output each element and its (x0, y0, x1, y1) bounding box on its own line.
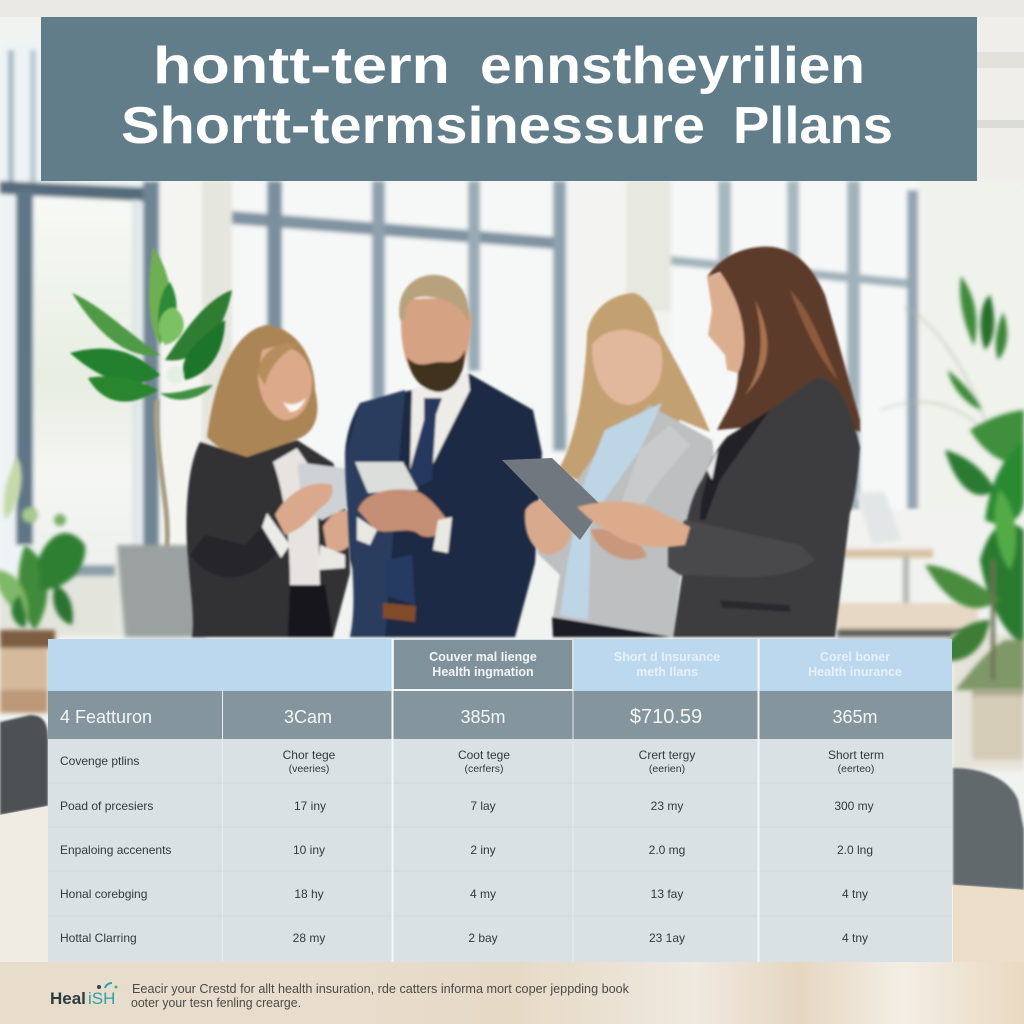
person: woman in dark blazer (577, 247, 860, 637)
table body background (48, 639, 952, 962)
plant: right (880, 276, 1024, 690)
row: accents (60, 843, 873, 857)
summary row: 385m (460, 707, 506, 727)
row: coverage: 4 tny (842, 887, 868, 901)
logo: Healish: Heal (50, 989, 86, 1008)
foreground chairs (0, 715, 1024, 890)
centre window (232, 181, 566, 461)
title text: Pllans (733, 97, 893, 155)
summary row: $710.59 (630, 706, 702, 728)
row: coverage: 4 my (470, 887, 496, 901)
footer note: Eeacir your Crestd for allt health insuration, rde catters informa mort coper jeppding book (132, 982, 630, 996)
row: coverage: 13 fay (651, 887, 683, 901)
row: coverage (60, 887, 868, 901)
row: clarring: 4 tny (842, 931, 868, 945)
row: period: Poad of prcesiers (60, 799, 153, 813)
title text (121, 37, 893, 155)
row: period: 7 lay (470, 799, 496, 813)
row: accents: 2 iny (470, 843, 496, 857)
row: period (60, 799, 874, 813)
right window (671, 181, 918, 513)
summary row: 365m (832, 707, 878, 727)
person: man in navy suit (345, 275, 542, 637)
person: woman in grey blazer (525, 293, 713, 637)
row: coverage plans: (veeries) (289, 763, 329, 775)
row: coverage plans: (eerteo) (838, 763, 874, 775)
floor and distant furniture (0, 491, 1024, 770)
row: coverage plans: Short term (828, 748, 884, 762)
row: period: 300 my (834, 799, 874, 813)
title text: Shortt-termsinessure (121, 97, 705, 155)
footer note (131, 982, 630, 1010)
person: woman on left (186, 325, 357, 637)
header row: meth Ilans (636, 665, 698, 679)
title text: ennstheyrilien (480, 37, 865, 95)
summary row (48, 691, 952, 739)
wall columns (160, 181, 202, 561)
foreground desk (0, 806, 1024, 1024)
header row: Health ingmation (432, 665, 534, 679)
tablet: held by grey blazer woman (502, 458, 603, 540)
row: period: 23 my (651, 799, 683, 813)
logo: Healish: iSH (88, 989, 115, 1008)
logo: Healish (50, 983, 118, 1008)
row: coverage: 18 hy (294, 887, 324, 901)
row: coverage plans: Coot tege (458, 748, 510, 762)
row: coverage plans (60, 748, 884, 775)
left window (0, 40, 159, 636)
header row: Corel boner (820, 650, 890, 664)
row: period: 17 iny (294, 799, 326, 813)
row: accents: 2.0 mg (649, 843, 685, 857)
row: accents: 10 iny (293, 843, 325, 857)
footer note: ooter your tesn fenling crearge. (131, 996, 301, 1010)
row: coverage plans: (eerien) (649, 763, 685, 775)
header row (48, 639, 952, 691)
row: accents: Enpaloing accenents (60, 843, 171, 857)
summary row: 4 Featturon (60, 707, 152, 727)
header row: Health inurance (808, 665, 902, 679)
row: coverage plans: (cerfers) (464, 763, 504, 775)
row: accents: 2.0 lng (837, 843, 873, 857)
row: coverage plans: Crert tergy (639, 748, 695, 762)
title text: hontt-tern (153, 37, 450, 95)
row: clarring: 28 my (293, 931, 325, 945)
comparison table (48, 639, 952, 962)
row: clarring (60, 931, 868, 945)
row: clarring: Hottal Clarring (60, 931, 137, 945)
row: clarring: 23 1ay (649, 931, 685, 945)
header row: Couver mal Iienge (429, 650, 537, 664)
title banner (41, 17, 977, 181)
row: coverage plans: Chor tege (283, 748, 336, 762)
grid lines (48, 639, 952, 962)
row: coverage: Honal corebging (60, 887, 147, 901)
plant: left tall (70, 247, 232, 548)
summary row: 3Cam (284, 707, 332, 727)
row: coverage plans: Covenge ptlins (60, 754, 139, 768)
plant: left low (0, 457, 85, 630)
row: clarring: 2 bay (468, 931, 498, 945)
header row: Short d Insurance (614, 650, 720, 664)
